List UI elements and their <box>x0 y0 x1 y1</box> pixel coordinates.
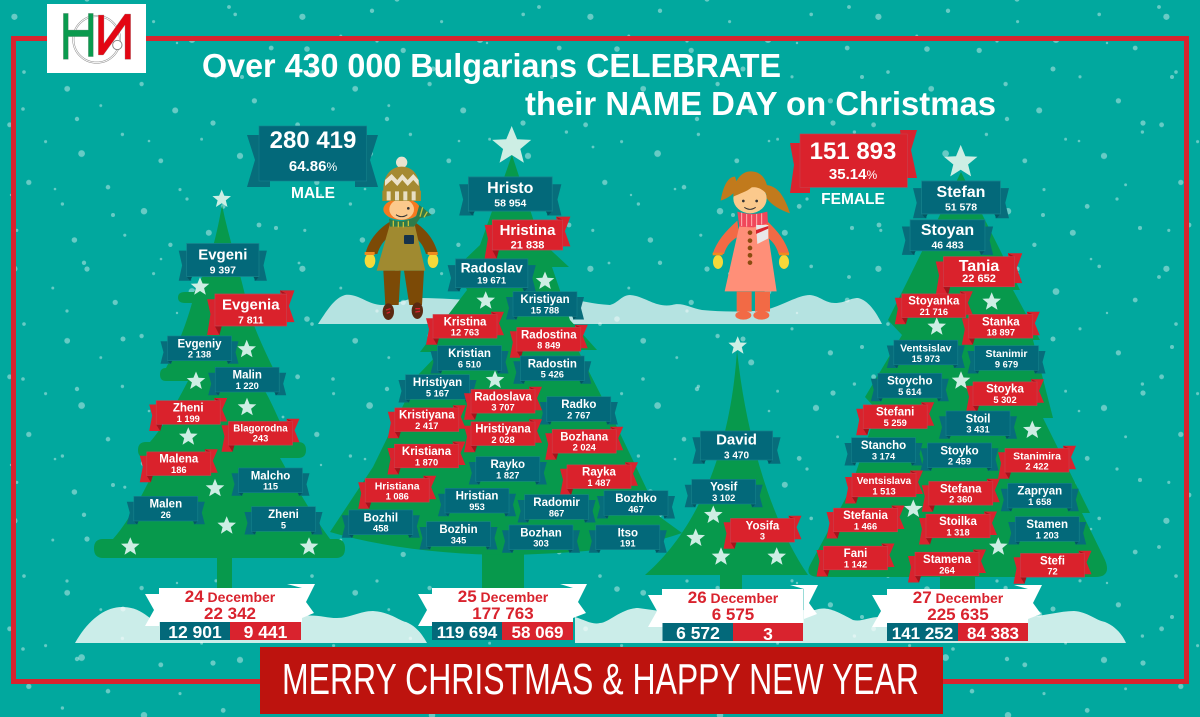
ribbon: Stoyan: Stoyan <box>921 222 974 239</box>
ribbon: Stanimir <box>968 346 1046 374</box>
ribbon: Stefania: 1 466 <box>854 521 877 531</box>
ribbon: Bozhin <box>420 522 498 550</box>
ribbon: Stamen: 1 203 <box>1036 530 1059 540</box>
ribbon: Stoyko: 2 459 <box>948 457 971 467</box>
ribbon: Itso: Itso <box>618 527 638 539</box>
ribbon: Radoslav: 19 671 <box>477 275 507 286</box>
ribbon: Blagorodna: Blagorodna <box>233 423 288 434</box>
date panel: 24 December: 9 441 <box>244 622 288 642</box>
ribbon: Bozhan: Bozhan <box>520 527 562 539</box>
tree: 27 December <box>808 172 1107 592</box>
ribbon: Evgeni: Evgeni <box>198 246 247 263</box>
ribbon: Fani: Fani <box>844 548 867 560</box>
ribbon: Radko: 2 767 <box>567 410 590 420</box>
title: Over 430 000 Bulgarians CELEBRATE <box>202 47 781 84</box>
ribbon: Ventsislava <box>845 470 923 504</box>
date panel: 24 December: 22 342 <box>204 604 256 623</box>
ribbon: Stanka: Stanka <box>982 316 1020 328</box>
male total ribbon: 280 419 <box>270 127 356 154</box>
ribbon: Hristiyana: 2 028 <box>491 435 515 445</box>
ribbon: Hristo <box>459 177 561 216</box>
ribbon: Yosif: 3 102 <box>712 493 735 503</box>
ribbon: Stoil <box>939 411 1017 439</box>
ribbon: Stefana: 2 360 <box>949 495 972 505</box>
ribbon: Zapryan <box>1001 483 1079 511</box>
ribbon: Radoslava: Radoslava <box>474 391 532 403</box>
ribbon: Stefania: Stefania <box>843 510 888 522</box>
ribbon: Stefani: 5 259 <box>884 418 907 428</box>
ribbon: Stoycho: Stoycho <box>887 376 932 388</box>
ribbon: Blagorodna: 243 <box>253 434 268 444</box>
male total ribbon <box>247 126 378 202</box>
ribbon: Rayka <box>560 462 638 495</box>
ribbon: Zheni female: Zheni <box>173 402 204 414</box>
ribbon: Kristiyana <box>388 405 466 438</box>
ribbon: Fani <box>816 544 894 576</box>
ribbon: David <box>692 431 781 464</box>
ribbon: Stanimira <box>998 446 1076 479</box>
ribbon: Evgeni: 9 397 <box>210 264 236 276</box>
ribbon: Hristo: 58 954 <box>494 198 527 210</box>
ribbon: Stoyan <box>902 220 993 255</box>
ribbon: Stoil: Stoil <box>966 413 990 425</box>
ribbon: Kristiana: Kristiana <box>402 446 452 458</box>
ribbon: Zheni male: Zheni <box>268 509 299 521</box>
ribbon: Malcho: 115 <box>263 482 278 492</box>
title <box>202 47 996 122</box>
ribbon: Rayko: Rayko <box>491 459 525 471</box>
date panel: 26 December: 3 <box>763 624 773 644</box>
date panel: 26 December: 6 572 <box>676 623 720 643</box>
female total ribbon: 151 893 <box>810 138 896 165</box>
ribbon: Kristiyan: Kristiyan <box>520 294 570 306</box>
ribbon: Stoilka: Stoilka <box>939 516 977 528</box>
ribbon: Zheni female: 1 199 <box>177 414 200 424</box>
ribbon: Radomir <box>518 495 596 522</box>
ribbon: Stanka: 18 897 <box>987 328 1015 338</box>
ribbon: Tania: 22 652 <box>962 273 996 285</box>
ribbon: Stefana <box>922 479 1000 512</box>
stars on trees <box>121 126 1042 565</box>
ribbon: Tania: Tania <box>959 258 999 275</box>
ribbon: Stefania <box>826 506 904 538</box>
ribbon: Bozhko: Bozhko <box>615 493 657 505</box>
ribbon: Malcho <box>232 468 310 496</box>
ribbon: Radostina <box>510 325 588 358</box>
ribbon: Evgeniy: Evgeniy <box>177 338 222 350</box>
ribbon: Hristina: 21 838 <box>511 240 544 252</box>
date panel: 26 December: 6 575 <box>712 605 754 624</box>
ribbon: Stancho: 3 174 <box>872 451 896 461</box>
ribbon: Bozhko: 467 <box>628 504 644 514</box>
ribbon: Ventsislav: 15 973 <box>912 354 940 364</box>
ribbon: David: 3 470 <box>724 450 749 461</box>
ribbon: Rayko: 1 827 <box>496 470 519 480</box>
date panel: 27 December: 225 635 <box>927 605 989 624</box>
ribbon: Hristiyan <box>398 375 476 402</box>
ribbon: Ventsislava: 1 513 <box>872 486 896 496</box>
ribbon: Yosif <box>685 479 763 507</box>
ribbon: Radoslav <box>448 259 536 291</box>
ribbon: Radostina: 8 849 <box>537 341 560 351</box>
ribbon: Bozhil <box>342 510 420 538</box>
date panel: 27 December: 84 383 <box>967 624 1019 643</box>
male total ribbon: 64.86% <box>289 158 337 175</box>
ribbon: Kristina: 12 763 <box>451 328 479 338</box>
title: their NAME DAY on Christmas <box>525 85 996 122</box>
ribbon: Stoilka <box>919 512 997 544</box>
ribbon: Malin: 1 220 <box>236 381 259 391</box>
ribbon: Kristiana: 1 870 <box>415 457 438 467</box>
ribbon: Radostin <box>513 356 591 384</box>
ribbon: Stamena <box>908 550 986 582</box>
ribbon: Stamena: 264 <box>939 565 956 575</box>
ribbon: Evgenia: Evgenia <box>222 296 280 313</box>
ribbon: Stanka <box>962 312 1040 345</box>
ribbon: Bozhana: Bozhana <box>560 431 609 443</box>
ribbon: Hristo: Hristo <box>487 180 534 197</box>
ribbon: Hristiana <box>358 476 436 509</box>
tree: 26 December <box>645 350 808 592</box>
snow hill behind children <box>318 295 882 324</box>
ribbon: Stefan: 51 578 <box>945 202 977 214</box>
ribbon: Ventsislav: Ventsislav <box>900 342 952 354</box>
illustration: boy <box>365 157 438 320</box>
ribbon: Evgenia <box>207 290 294 335</box>
date panel: 24 December <box>145 584 315 642</box>
ribbon: Stoyan: 46 483 <box>931 239 964 251</box>
ribbon: Malcho: Malcho <box>251 470 290 482</box>
female total ribbon: FEMALE <box>821 191 885 208</box>
ribbon: Bozhana <box>545 427 623 460</box>
ribbon: Ventsislava: Ventsislava <box>857 476 912 487</box>
ribbon: Hristina <box>485 217 570 258</box>
ribbon: Stoycho <box>871 373 949 401</box>
ribbon: Hristiyana <box>464 419 542 452</box>
ribbon: Kristina: Kristina <box>444 316 487 328</box>
ribbon: Hristiyan: 5 167 <box>426 388 449 398</box>
ribbon: Radostina: Radostina <box>521 329 577 341</box>
ribbon: Hristian <box>438 488 516 516</box>
ribbon: Stefani <box>856 402 934 435</box>
ribbon: Stancho <box>844 438 922 466</box>
ribbon: Stoyka <box>966 379 1044 412</box>
date panel: 24 December: 24 December <box>185 587 276 606</box>
ribbon: Rayka: Rayka <box>582 467 617 479</box>
date panel: 25 December: 177 763 <box>472 604 534 623</box>
ribbon: Stefi: Stefi <box>1040 555 1065 567</box>
date panel: 27 December: 141 252 <box>892 624 953 643</box>
ribbon: Stamen <box>1008 517 1086 544</box>
ribbon: Radko: Radko <box>561 399 596 411</box>
ribbon: Malena: Malena <box>159 454 199 466</box>
date panel: 25 December <box>418 584 587 642</box>
ribbon: Hristiana: 1 086 <box>386 492 409 502</box>
illustration: girl <box>713 171 790 320</box>
ribbon: Radoslava: 3 707 <box>491 403 515 413</box>
ribbon: Yosifa <box>724 516 802 549</box>
date panel: 25 December: 58 069 <box>512 623 564 642</box>
ribbon: David: David <box>716 431 757 448</box>
ribbon: Kristiyan: 15 788 <box>531 305 559 315</box>
ribbon: Bozhan: 303 <box>533 539 549 549</box>
ribbon: Hristiyan: Hristiyan <box>413 377 462 389</box>
banner: greeting <box>260 647 943 714</box>
ribbon: Zheni male <box>244 507 322 534</box>
ribbon: Hristiyana: Hristiyana <box>475 424 531 436</box>
ribbon: Zheni male: 5 <box>281 520 286 530</box>
ribbon: Stoyanka: 21 716 <box>920 307 948 317</box>
ribbon: Evgenia: 7 811 <box>238 314 264 326</box>
ribbon: Yosifa: Yosifa <box>746 520 780 532</box>
date panel: 27 December <box>872 585 1042 643</box>
ribbon: Fani: 1 142 <box>844 559 867 569</box>
ribbon: Zapryan: 1 658 <box>1028 497 1051 507</box>
ribbon: Stefi: 72 <box>1047 567 1058 577</box>
ribbon: Malena: 186 <box>171 465 187 475</box>
ribbon: Tania <box>936 253 1022 295</box>
ribbon: Malen <box>127 496 205 524</box>
ribbon: Bozhil: Bozhil <box>364 512 398 524</box>
date panel: 26 December <box>648 585 818 644</box>
ribbon: Stoyka: Stoyka <box>986 384 1024 396</box>
ribbon: Malena <box>140 449 218 482</box>
logo <box>47 4 146 73</box>
ribbon: Stefan <box>913 181 1009 218</box>
ribbon: Kristian: 6 510 <box>458 359 481 369</box>
ribbon: Radoslava <box>464 387 542 420</box>
tree: 25 December <box>330 155 682 592</box>
ribbon: Itso <box>589 525 667 553</box>
ribbon: Bozhin: 345 <box>451 535 466 545</box>
ribbon: Bozhana: 2 024 <box>573 443 597 453</box>
ribbon: Hristian: Hristian <box>456 491 498 503</box>
ribbon: Evgeniy <box>160 336 238 364</box>
ribbon: Stoyanka <box>895 291 973 324</box>
ribbon: Rayka: 1 487 <box>587 478 611 488</box>
date panel: 26 December: 26 December <box>688 588 779 607</box>
ribbon: Malin: Malin <box>233 370 262 382</box>
date panel: 25 December: 119 694 <box>437 623 498 642</box>
ribbon: Yosifa: 3 <box>760 532 765 542</box>
ribbon: Bozhin: Bozhin <box>439 524 478 536</box>
ribbon: Stoilka: 1 318 <box>946 527 970 537</box>
date panel: 27 December: 27 December <box>913 588 1004 607</box>
ribbon: Stefana: Stefana <box>940 483 982 495</box>
ribbon: Kristian: Kristian <box>448 348 491 360</box>
ribbon: Rayko <box>469 457 547 484</box>
ribbon: Stoil: 3 431 <box>966 425 990 435</box>
male total ribbon: MALE <box>291 185 335 202</box>
date panel: 25 December: 25 December <box>458 587 549 606</box>
ribbon: Radomir: 867 <box>549 508 564 518</box>
ribbon: Stoyanka: Stoyanka <box>908 296 960 308</box>
ribbon: Kristina <box>426 312 504 345</box>
ribbon: Yosif: Yosif <box>710 482 737 494</box>
ribbon: Zheni female <box>149 398 227 431</box>
snow hills at the bottom <box>75 607 1126 643</box>
ribbon: Stanimir: Stanimir <box>985 348 1028 360</box>
ribbon: Stoycho: 5 614 <box>898 387 922 397</box>
banner: greeting: MERRY CHRISTMAS & HAPPY NEW YEAR <box>282 655 919 704</box>
ribbon: Stamen: Stamen <box>1026 519 1068 531</box>
ribbon: Stancho: Stancho <box>861 440 906 452</box>
ribbon: Ventsislav <box>887 340 965 368</box>
ribbon: Evgeniy: 2 138 <box>188 350 211 360</box>
ribbon: Stefi <box>1014 551 1092 584</box>
ribbon: Stanimira: Stanimira <box>1013 450 1061 462</box>
ribbon: Stefan: Stefan <box>937 184 985 201</box>
ribbon: Kristiyana: 2 417 <box>415 421 438 431</box>
ribbon: Hristian: 953 <box>469 502 485 512</box>
ribbon: Stoyka: 5 302 <box>993 395 1017 405</box>
ribbon: Radko <box>540 397 618 424</box>
ribbon: Stanimira: 2 422 <box>1025 462 1049 472</box>
date panel: 24 December: 12 901 <box>168 622 222 642</box>
ribbon: Stoyko: Stoyko <box>940 445 979 457</box>
ribbon: Zapryan: Zapryan <box>1017 486 1062 498</box>
ribbon: Evgeni <box>179 244 267 281</box>
ribbon: Itso: 191 <box>620 539 636 549</box>
ribbon: Stoyko <box>920 443 998 471</box>
ribbon: Hristiana: Hristiana <box>375 480 420 492</box>
ribbon: Radomir: Radomir <box>533 497 580 509</box>
ribbon: Malin <box>208 367 286 395</box>
ribbon: Radoslav: Radoslav <box>461 260 523 276</box>
female total ribbon: 35.14% <box>829 166 877 183</box>
ribbon: Malen: 26 <box>161 510 171 520</box>
ribbon: Radostin: 5 426 <box>541 370 564 380</box>
ribbon: Kristiyan <box>506 292 584 320</box>
ribbon: Kristiyana: Kristiyana <box>399 410 455 422</box>
ribbon: Stefani: Stefani <box>876 407 914 419</box>
ribbon: Bozhil: 458 <box>373 524 389 534</box>
ribbon: Blagorodna <box>222 419 300 452</box>
female total ribbon <box>790 130 917 208</box>
ribbon: Radostin: Radostin <box>528 358 577 370</box>
ribbon: Stanimir: 9 679 <box>995 359 1018 369</box>
ribbon: Kristian <box>430 346 508 374</box>
ribbon: Malen: Malen <box>150 499 182 511</box>
ribbon: Kristiana <box>388 442 466 474</box>
tree: 24 December <box>94 205 345 592</box>
ribbon: Stamena: Stamena <box>923 554 972 566</box>
ribbon: Hristina: Hristina <box>500 222 556 239</box>
ribbon: Bozhan <box>502 525 580 553</box>
ribbon: Bozhko <box>597 491 675 518</box>
